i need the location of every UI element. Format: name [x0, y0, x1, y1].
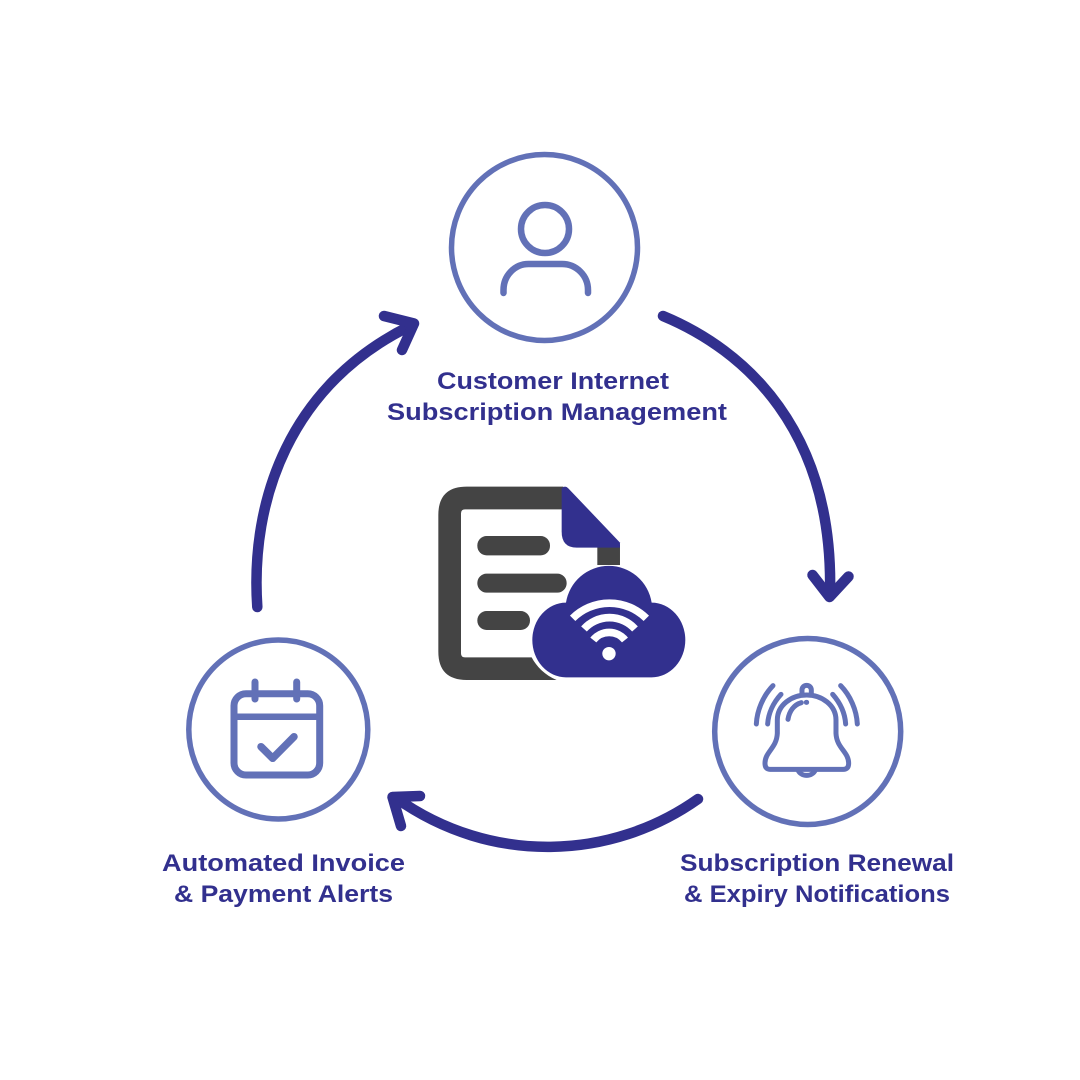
document body — [438, 487, 620, 680]
heading: subscription renewal and expiry notifications: Subscription Renewal — [680, 850, 954, 877]
panel: customer internet subscription management — [387, 154, 727, 426]
heading: automated invoice and payment alerts: & Payment Alerts — [174, 881, 393, 908]
arrow: top to right — [663, 316, 848, 597]
arrow: right to left — [392, 796, 698, 847]
wifi symbol — [573, 603, 646, 660]
document fold — [562, 487, 620, 548]
heading: automated invoice and payment alerts — [162, 850, 405, 908]
cloud — [532, 566, 685, 677]
icon: bell in circle — [715, 638, 901, 824]
heading: customer internet subscription management: Customer Internet — [437, 368, 669, 395]
panel: automated invoice and payment alerts — [162, 640, 405, 908]
heading: customer internet subscription management: Subscription Management — [387, 399, 727, 426]
heading: subscription renewal and expiry notifications: & Expiry Notifications — [684, 881, 950, 908]
icon: central document with wifi cloud — [438, 487, 685, 680]
heading: automated invoice and payment alerts: Automated Invoice — [162, 850, 405, 877]
document text lines — [477, 536, 567, 630]
icon: calendar in circle — [189, 640, 368, 819]
heading: subscription renewal and expiry notifications — [680, 850, 954, 908]
heading: customer internet subscription management — [387, 368, 727, 426]
icon: user in circle — [452, 154, 638, 340]
arrow: left to top — [256, 316, 414, 607]
panel: subscription renewal and expiry notifications — [680, 638, 954, 908]
